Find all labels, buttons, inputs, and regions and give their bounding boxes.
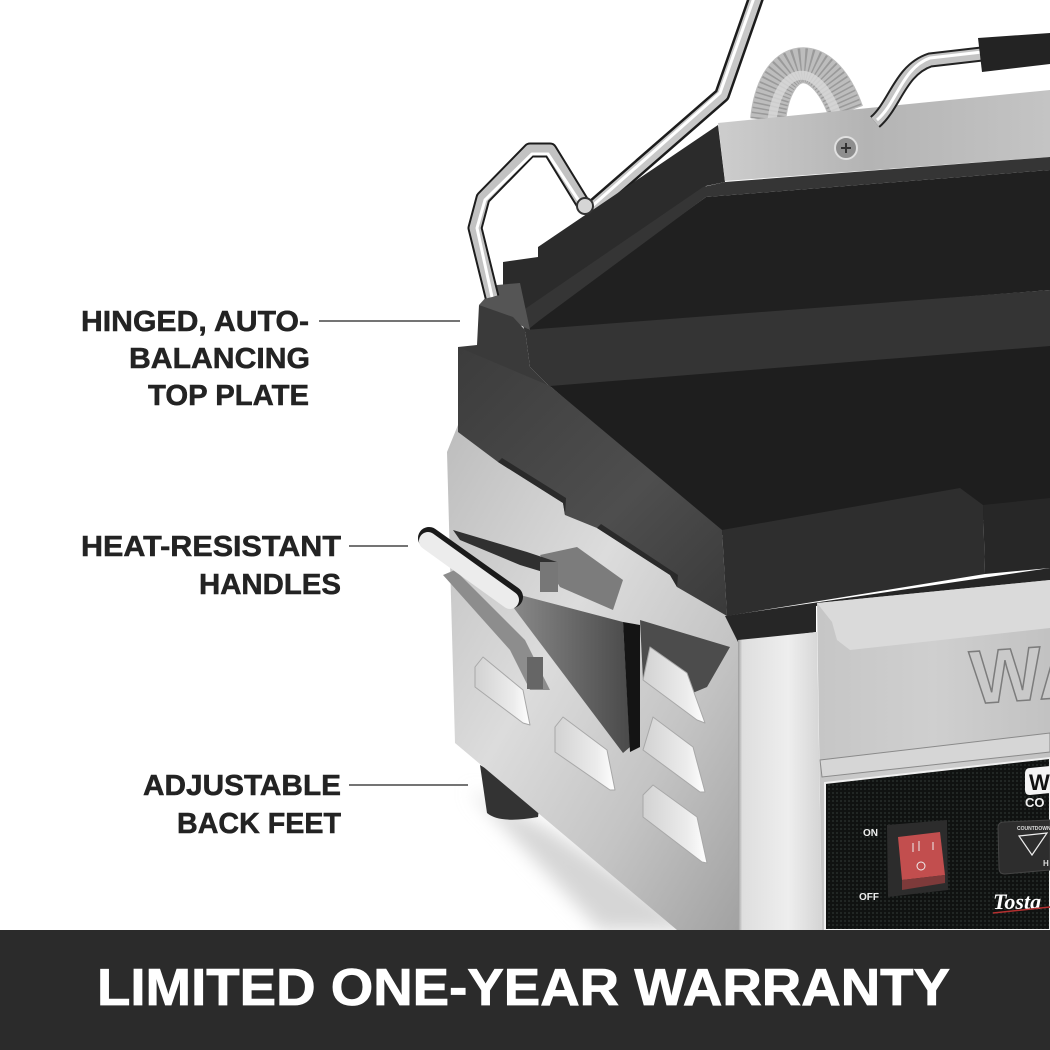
callout text: top plate: TOP PLATE [148,380,309,412]
brand tag [1025,766,1050,810]
front loop handle [475,150,585,297]
top plate wedge [503,125,725,317]
lower plate right lip [983,498,1050,574]
brand tag: CO [1025,795,1044,810]
shadow below front plate [725,568,1050,642]
brand tag: W [1029,770,1050,795]
steel side panel [447,425,738,930]
callout: back feet [143,770,468,840]
lower cooking surface [550,346,1050,535]
model script: Tosta [993,889,1041,914]
side vents [475,647,707,863]
front corner post [738,632,822,930]
latch upper arm [453,530,557,575]
upper plate rim [519,157,1050,332]
timer display [998,820,1050,874]
callout text: back feet: ADJUSTABLE [143,770,341,802]
reflection on side panel, lower [640,620,730,697]
mounting screw [835,137,857,159]
upper plate ridge [525,290,1050,387]
top plate steel backing [718,90,1050,181]
hinge casting [458,305,600,440]
latch screws [527,657,543,689]
on off switch: ON [863,828,878,839]
reflection on side panel, upper [540,547,623,610]
floor shadow [470,790,700,930]
hinge bracket [479,283,530,330]
leader line: handles [349,545,408,547]
leader line: back feet [349,784,468,786]
callout: handles [81,531,408,601]
footer banner [0,930,1050,1050]
lower steel strip [820,733,1050,777]
latch upper screw [540,562,558,592]
rear handle [875,33,1050,122]
lower plate left face [458,347,727,616]
callout text: handles: HANDLES [199,569,341,601]
latch grip [428,538,512,600]
timer display: H [1043,859,1049,868]
timer display: COUNTDOWN [1017,826,1050,832]
flexible spring conduit [768,65,846,120]
front upper lip [817,580,1050,650]
latch lower arm [443,570,550,690]
lower plate front lip [722,488,985,616]
control panel [825,758,1050,930]
hinge bolt [577,198,593,214]
grill illustration [428,0,1050,930]
warranty heading: LIMITED ONE-YEAR WARRANTY [97,959,950,1017]
callout text: handles: HEAT-RESISTANT [81,531,341,563]
hinge arm [590,0,757,210]
plate notches [498,458,678,587]
callout text: top plate: HINGED, AUTO- [81,306,309,338]
side latch handle [428,530,640,753]
on off switch: OFF [859,892,879,903]
callout: top plate [81,306,460,412]
upper cooking plate underside [525,170,1050,332]
front steel panel [817,580,1050,930]
callout text: back feet: BACK FEET [177,808,341,840]
callout text: top plate: BALANCING [129,343,310,375]
on off switch [859,820,948,903]
back foot [480,765,540,820]
leader line: top plate [319,320,460,322]
latch blade fold [623,622,640,752]
latch blade [510,595,630,753]
